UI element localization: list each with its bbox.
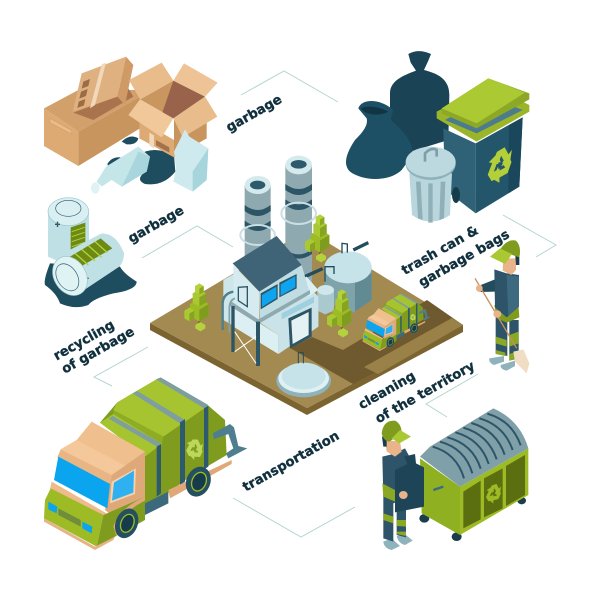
connector line: trash can (503, 215, 556, 257)
open cardboard box (128, 63, 218, 157)
label: trash can and garbage bags: trash can & (399, 223, 481, 279)
large garbage truck (44, 377, 247, 550)
garbage container (419, 408, 528, 541)
icon: garbage bags, wheelie bin and trash can (346, 51, 529, 223)
icon: batteries (45, 198, 137, 307)
label: recycling of garbage: of garbage (59, 324, 137, 377)
pipes (303, 243, 368, 277)
label: cleaning of the territory: cleaning (356, 369, 418, 413)
connector line: cleaning (426, 374, 478, 417)
plant details (184, 156, 372, 397)
tree right (327, 289, 351, 337)
tall garbage bag (390, 51, 449, 153)
workers and container (382, 240, 529, 550)
tree left (184, 283, 209, 331)
connector line: transportation (233, 498, 355, 537)
roof (233, 236, 302, 292)
connector line: garbage middle (142, 226, 233, 258)
icon: cardboard boxes, bottle and paper (44, 57, 218, 194)
label: garbage middle: garbage (126, 203, 187, 247)
connector line: recycling (94, 347, 148, 386)
round dish tank (276, 353, 331, 397)
label: transportation: transportation (240, 429, 342, 495)
small garbage truck on platform (363, 293, 430, 351)
tree behind chimney (305, 214, 329, 262)
label: trash can and garbage bags: garbage bags (416, 227, 512, 291)
metal trash can (406, 147, 456, 223)
platform: recycling plant (150, 230, 463, 415)
storage tank (324, 243, 372, 313)
small garbage bag (346, 101, 413, 179)
chimneys (240, 156, 316, 283)
glass bottle (91, 147, 150, 194)
road (290, 300, 463, 384)
paper stack (173, 129, 208, 192)
small tank (317, 285, 334, 314)
main building (223, 236, 318, 366)
label: garbage top: garbage (224, 92, 285, 136)
wheelie bin (437, 78, 529, 213)
label: cleaning of the territory: of the territory (373, 359, 478, 427)
connector line: garbage top (241, 71, 338, 102)
worker with garbage bag (382, 421, 424, 550)
cardboard box with lid (44, 57, 140, 166)
worker with broom (475, 240, 529, 373)
label: recycling of garbage: recycling (51, 318, 117, 364)
